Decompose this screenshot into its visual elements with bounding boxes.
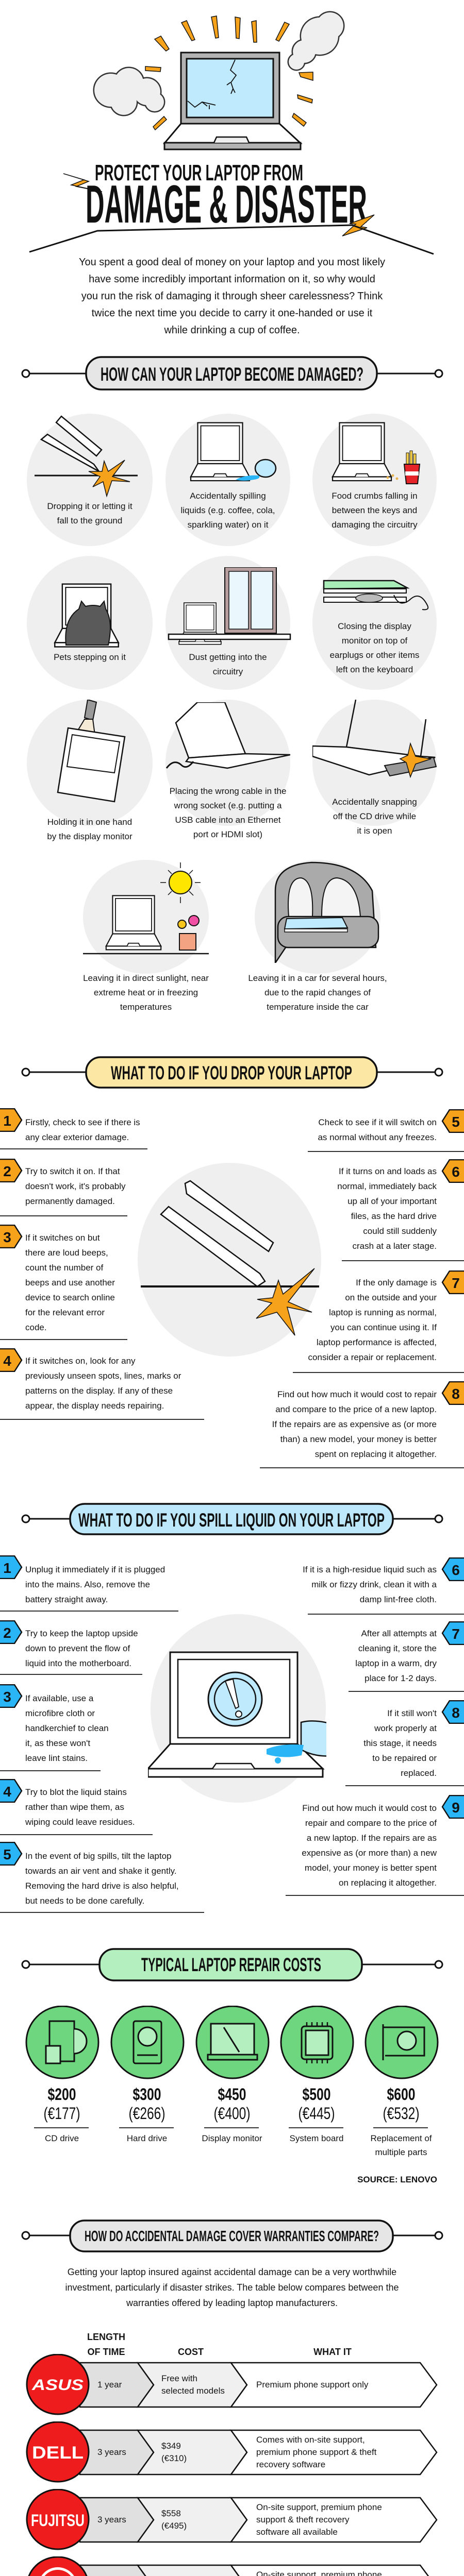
table column headers: LENGTH — [87, 2332, 125, 2342]
caption: by the display monitor — [47, 832, 132, 841]
panel: holding one hand — [27, 700, 153, 841]
step: drop 2: Try to switch it on. If that — [25, 1166, 120, 1176]
row: DELL: (€310) — [161, 2453, 187, 2463]
step: drop 6: could still suddenly — [363, 1226, 437, 1236]
step: spill 4: wiping could leave residues. — [25, 1817, 135, 1827]
badge: spill 8 — [441, 1700, 464, 1724]
panel: pets — [27, 556, 153, 690]
step: spill 9 — [302, 1801, 437, 1890]
step: spill 9: on replacing it altogether. — [339, 1878, 437, 1888]
caption: temperature inside the car — [267, 1002, 369, 1012]
step: spill 9: Find out how much it would cost to — [302, 1803, 437, 1813]
step: drop 5: Check to see if it will switch on — [318, 1117, 437, 1127]
step: drop 3 — [25, 1230, 115, 1335]
step: spill 5: towards an air vent and shake it gently. — [25, 1866, 177, 1876]
badge: spill 6: 6 — [452, 1562, 460, 1578]
icon: laptop with fries — [332, 422, 421, 484]
caption: wrong socket (e.g. putting a — [174, 801, 281, 810]
cost: CD drive: (€177) — [43, 2104, 80, 2123]
intro: warranties: Getting your laptop insured against accidental damage can be a very worthwhile — [68, 2267, 396, 2277]
icon: laptop with cable — [166, 702, 290, 769]
step: spill 8: If it still won't — [387, 1708, 437, 1718]
step: spill 7: place for 1-2 days. — [364, 1673, 437, 1683]
step: spill 8: to be repaired or — [372, 1753, 437, 1763]
caption: Closing the display — [338, 621, 411, 631]
heading: accidental damage cover warranties — [0, 2219, 464, 2253]
badge: drop 8 — [441, 1381, 464, 1405]
step: spill 6: damp lint-free cloth. — [360, 1595, 437, 1604]
cost: system board: System board — [290, 2133, 343, 2143]
caption — [47, 501, 132, 526]
step: spill 9: a new laptop. If the repairs are as — [307, 1833, 437, 1843]
step: spill 7: cleaning it, store the — [358, 1643, 437, 1653]
row: DELL: DELL — [32, 2443, 84, 2463]
step: drop 4 — [25, 1353, 181, 1413]
table column headers: COST — [178, 2347, 204, 2357]
step: drop 2: doesn't work, it's probably — [25, 1181, 126, 1191]
step: spill 3: handkerchief to clean — [25, 1723, 109, 1733]
step: drop 3: count the number of — [25, 1263, 103, 1273]
badge: spill 7: 7 — [452, 1626, 460, 1642]
step: drop 6: files, as the hard drive — [351, 1211, 437, 1221]
source: lenovo: SOURCE: LENOVO — [357, 2175, 437, 2184]
step: drop 6: normal, immediately back — [337, 1181, 437, 1191]
caption — [83, 973, 209, 1012]
step: drop 8: spent on replacing it altogether. — [315, 1449, 437, 1459]
step: drop 3: device to search online — [25, 1293, 115, 1302]
cost: multiple parts — [360, 2006, 442, 2171]
step: spill 6: milk or fizzy drink, clean it with a — [311, 1580, 437, 1589]
step: spill 5: Removing the hard drive is also helpful, — [25, 1881, 179, 1891]
intro text: have some incredibly important information on it, so why would — [89, 274, 375, 285]
caption — [180, 491, 275, 530]
panel: dropping — [27, 414, 153, 546]
step: spill 4 — [25, 1785, 135, 1829]
step: spill 2: liquid into the motherboard. — [25, 1658, 131, 1668]
badge: drop 2: 2 — [3, 1163, 11, 1179]
illustration: dropped laptop — [138, 1163, 321, 1357]
panel: left in car — [248, 860, 387, 1012]
step: drop 3: If it switches on but — [25, 1233, 100, 1243]
caption — [189, 652, 267, 676]
row: FUJITSU: (€495) — [161, 2521, 187, 2531]
caption — [248, 973, 387, 1012]
panel: spilling liquids — [165, 414, 290, 546]
step: drop 6: up all of your important — [347, 1196, 437, 1206]
step: spill 3: it, as these won't — [25, 1738, 90, 1748]
step: spill 2 — [25, 1626, 138, 1671]
caption: monitor on top of — [342, 636, 407, 646]
step: drop 7: consider a repair or replacement. — [308, 1352, 437, 1362]
step: spill 7: laptop in a warm, dry — [355, 1658, 437, 1668]
caption: Food crumbs falling in — [332, 491, 418, 501]
heading: what to do if you spill liquid — [0, 1503, 464, 1536]
step: spill 7 — [355, 1626, 437, 1686]
icon: chip — [280, 2006, 354, 2080]
cost: system board: $500 — [302, 2085, 331, 2104]
caption: Leaving it in a car for several hours, — [248, 973, 387, 983]
step: spill 1: into the mains. Also, remove the — [25, 1580, 150, 1589]
step: drop 8: If the repairs are as expensive as (or more — [272, 1419, 437, 1429]
row: ASUS: Free with — [161, 2374, 197, 2383]
badge: spill 7 — [441, 1621, 464, 1645]
step: drop 5 — [318, 1115, 437, 1145]
badge: spill 9 — [441, 1795, 464, 1819]
caption — [330, 621, 419, 674]
step: spill 8: work properly at — [374, 1723, 437, 1733]
step: spill 2: down to prevent the flow of — [25, 1643, 130, 1653]
badge: drop 3: 3 — [3, 1229, 11, 1245]
cost: multiple parts: $600 — [387, 2085, 416, 2104]
row: FUJITSU: $558 — [161, 2509, 181, 2518]
caption: USB cable into an Ethernet — [175, 815, 281, 825]
caption — [332, 491, 418, 530]
step: drop 3: for the relevant error — [25, 1308, 105, 1317]
badge: spill 2 — [0, 1620, 23, 1644]
row: DELL: premium phone support & theft — [256, 2447, 376, 2457]
icon: laptop sun and flower — [83, 862, 209, 954]
icon: laptop near window — [168, 567, 291, 645]
step: drop 2 — [25, 1164, 126, 1209]
row: DELL — [0, 2421, 464, 2483]
cost: CD drive: CD drive — [45, 2133, 79, 2143]
intro text: twice the next time you decide to carry it one-handed or use it — [92, 308, 372, 319]
step: drop 5: as normal without any freezes. — [318, 1132, 437, 1142]
caption: Accidentally snapping — [332, 797, 417, 807]
step: spill 5: but needs to be done carefully. — [25, 1896, 144, 1906]
panel: food crumbs — [312, 414, 437, 546]
step: spill 5 — [25, 1849, 179, 1908]
step: spill 8: this stage, it needs — [363, 1738, 437, 1748]
row: DELL: $349 — [161, 2441, 181, 2451]
step: spill 3: If available, use a — [25, 1693, 93, 1703]
cost: CD drive: $200 — [47, 2085, 76, 2104]
panel: closing display on earplugs — [312, 556, 437, 690]
icon: falling laptop — [35, 415, 138, 498]
step: drop 6 — [337, 1164, 437, 1253]
hero illustration: broken laptop — [93, 11, 344, 150]
badge: drop 4 — [0, 1348, 23, 1372]
caption: Pets stepping on it — [54, 652, 126, 662]
icon: laptop with CD drive — [312, 700, 437, 778]
step: drop 8: and compare to the price of a new laptop. — [275, 1404, 437, 1414]
caption: circuitry — [213, 667, 243, 676]
caption: extreme heat or in freezing — [94, 988, 198, 997]
cost: display monitor — [191, 2006, 273, 2171]
badge: spill 9: 9 — [452, 1800, 460, 1816]
step: drop 6: crash at a later stage. — [353, 1241, 437, 1251]
step: drop 4: If it switches on, look for any — [25, 1356, 136, 1366]
heading: what to do if you drop your laptop — [22, 1056, 443, 1089]
row: ASUS — [0, 2354, 464, 2416]
caption: Dropping it or letting it — [47, 501, 132, 511]
step: drop 4: previously unseen spots, lines, marks or — [25, 1371, 181, 1381]
caption — [47, 817, 132, 841]
badge: drop 5: 5 — [452, 1114, 460, 1130]
step: drop 2: permanently damaged. — [25, 1196, 115, 1206]
badge: drop 2 — [0, 1159, 23, 1182]
panel: snapping CD drive — [312, 700, 437, 836]
step: drop 1: Firstly, check to see if there is — [25, 1117, 140, 1127]
step: spill 7: After all attempts at — [361, 1629, 437, 1638]
badge: spill 6 — [441, 1557, 464, 1581]
row: FUJITSU: 3 years — [97, 2515, 126, 2524]
row: HP — [0, 2556, 464, 2576]
icon: display — [195, 2006, 270, 2080]
intro: warranties — [26, 2264, 438, 2311]
row: FUJITSU: FUJITSU — [31, 2511, 85, 2530]
cost: hard drive — [106, 2006, 188, 2171]
icon: cat on laptop — [54, 583, 120, 648]
caption — [170, 786, 286, 839]
intro text: you run the risk of damaging it through sheer carelessness? Think — [81, 291, 383, 302]
step: drop 6: If it turns on and loads as — [339, 1166, 437, 1176]
step: spill 9: expensive as (or more than) a new — [302, 1848, 437, 1858]
step: drop 8 — [272, 1387, 437, 1462]
caption: sparkling water) on it — [188, 520, 268, 530]
row: ASUS: Premium phone support only — [256, 2380, 368, 2389]
badge: drop 7: 7 — [452, 1275, 460, 1291]
caption: Dust getting into the — [189, 652, 267, 662]
step: spill 2: Try to keep the laptop upside — [25, 1629, 138, 1638]
step: drop 3: there are loud beeps, — [25, 1248, 108, 1258]
panel: dust — [165, 556, 291, 690]
row: FUJITSU — [0, 2489, 464, 2551]
badge: drop 3 — [0, 1225, 23, 1248]
title — [29, 160, 434, 255]
cost: system board: (€445) — [298, 2104, 335, 2123]
step: drop 7 — [308, 1275, 437, 1365]
step: drop 3: beeps and use another — [25, 1278, 115, 1287]
step: drop 7: If the only damage is — [356, 1278, 437, 1287]
caption: due to the rapid changes of — [264, 988, 371, 997]
step: spill 4: rather than wipe them, as — [25, 1802, 124, 1812]
icon: closed laptop with earplugs — [323, 580, 429, 610]
intro text: while drinking a cup of coffee. — [164, 325, 300, 336]
intro text — [79, 257, 385, 336]
step: drop 1 — [25, 1117, 140, 1142]
intro: warranties: investment, particularly if disaster strikes. The table below compares between the — [65, 2282, 399, 2293]
step: spill 9: repair and compare to the price of — [305, 1818, 437, 1828]
step: spill 4: Try to blot the liquid stains — [25, 1787, 127, 1797]
badge: spill 1 — [0, 1555, 23, 1579]
step: spill 5: In the event of big spills, tilt the laptop — [25, 1851, 172, 1861]
cost: display monitor: (€400) — [213, 2104, 251, 2123]
badge: spill 5 — [0, 1842, 23, 1866]
table column headers — [77, 2330, 387, 2361]
badge: drop 6: 6 — [452, 1164, 460, 1180]
cost: CD drive — [21, 2006, 103, 2171]
step: spill 8 — [363, 1706, 437, 1781]
caption: fall to the ground — [57, 516, 122, 526]
badge: drop 8: 8 — [452, 1386, 460, 1402]
cost: hard drive: $300 — [133, 2085, 161, 2104]
badge: spill 5: 5 — [3, 1846, 11, 1862]
table column headers: OF TIME — [88, 2347, 125, 2357]
cost: display monitor: Display monitor — [202, 2133, 262, 2143]
cost: system board — [275, 2006, 358, 2171]
heading: how can your laptop become damaged — [22, 356, 443, 391]
step: spill 6: If it is a high-residue liquid such as — [303, 1565, 437, 1574]
step: spill 1 — [25, 1562, 165, 1607]
icon: card — [364, 2006, 439, 2080]
step: drop 4: appear, the display needs repairing. — [25, 1401, 164, 1411]
row: DELL: recovery software — [256, 2460, 325, 2469]
step: spill 3 — [25, 1691, 109, 1766]
illustration: laptop with spill warning — [148, 1614, 326, 1803]
row: ASUS: 1 year — [97, 2380, 122, 2389]
badge: drop 1 — [0, 1108, 23, 1132]
caption: port or HDMI slot) — [193, 829, 262, 839]
badge: spill 4 — [0, 1779, 23, 1803]
icon: hand holding laptop — [57, 700, 126, 803]
title: PROTECT YOUR LAPTOP FROM — [95, 160, 303, 185]
step: drop 7: laptop is running as normal, — [329, 1308, 437, 1317]
caption: temperatures — [120, 1002, 172, 1012]
step: drop 7: laptop performance is affected, — [317, 1337, 437, 1347]
step: spill 3: microfibre cloth or — [25, 1708, 95, 1718]
row: DELL: 3 years — [97, 2447, 126, 2457]
badge: spill 8: 8 — [452, 1705, 460, 1721]
badge: spill 1: 1 — [3, 1560, 11, 1576]
caption: earplugs or other items — [330, 650, 419, 660]
badge: spill 2: 2 — [3, 1625, 11, 1641]
heading: typical laptop repair costs: TYPICAL LAPTOP REPAIR COSTS — [141, 1954, 321, 1975]
table column headers: WHAT IT OFFERS? — [311, 2347, 354, 2372]
badge: drop 7 — [441, 1270, 464, 1294]
intro text: You spent a good deal of money on your laptop and you most likely — [79, 257, 385, 268]
badge: drop 6 — [441, 1159, 464, 1183]
step: drop 7: you can continue using it. If — [330, 1323, 437, 1332]
step: drop 8: than) a new model, your money is better — [280, 1434, 437, 1444]
caption: Leaving it in direct sunlight, near — [83, 973, 209, 983]
icon: CD drive — [25, 2006, 100, 2080]
step: drop 7: on the outside and your — [345, 1293, 437, 1302]
row: FUJITSU: software all available — [256, 2527, 338, 2537]
caption: liquids (e.g. coffee, cola, — [180, 505, 275, 515]
panel: wrong cable — [165, 700, 290, 839]
badge: spill 3: 3 — [3, 1689, 11, 1705]
heading: typical laptop repair costs — [0, 1948, 464, 1982]
row: ASUS: selected models — [161, 2386, 225, 2396]
step: drop 1: any clear exterior damage. — [25, 1132, 129, 1142]
row: FUJITSU: On-site support, premium phone — [256, 2502, 382, 2512]
step: spill 3: leave lint stains. — [25, 1753, 88, 1763]
cost: hard drive: Hard drive — [127, 2133, 167, 2143]
caption: off the CD drive while — [333, 811, 416, 821]
row: ASUS: ASUS — [31, 2377, 84, 2394]
intro: warranties: warranties offered by leading laptop manufacturers. — [126, 2298, 338, 2308]
cost: multiple parts: multiple parts — [375, 2147, 427, 2157]
cost: hard drive: (€266) — [129, 2104, 165, 2123]
step: drop 3: code. — [25, 1323, 47, 1332]
icon: car seat with laptop — [274, 861, 379, 963]
icon: laptop with cup — [190, 422, 276, 481]
badge: drop 4: 4 — [3, 1353, 11, 1369]
icon: hard drive — [110, 2006, 185, 2080]
badge: drop 5 — [441, 1109, 464, 1133]
step: spill 1: battery straight away. — [25, 1595, 108, 1604]
badge: spill 3 — [0, 1684, 23, 1708]
caption: it is open — [357, 826, 392, 836]
caption: Placing the wrong cable in the — [170, 786, 286, 796]
cost: multiple parts: (€532) — [383, 2104, 420, 2123]
caption: left on the keyboard — [336, 665, 413, 674]
step: spill 1: Unplug it immediately if it is plugged — [25, 1565, 165, 1574]
step: drop 4: patterns on the display. If any of these — [25, 1386, 173, 1396]
caption: Holding it in one hand — [47, 817, 132, 827]
step: spill 6 — [303, 1562, 437, 1607]
caption: damaging the circuitry — [332, 520, 418, 530]
step: spill 8: replaced. — [401, 1768, 437, 1778]
badge: spill 4: 4 — [3, 1784, 11, 1800]
cost: display monitor: $450 — [218, 2085, 246, 2104]
cost: multiple parts: Replacement of — [370, 2133, 432, 2143]
caption: Accidentally spilling — [190, 491, 266, 501]
step: drop 8: Find out how much it would cost to repair — [277, 1389, 437, 1399]
step: spill 9: model, your money is better spent — [305, 1863, 437, 1873]
row: FUJITSU: support & theft recovery — [256, 2515, 349, 2524]
panel: direct sunlight — [83, 860, 209, 1012]
row: DELL: Comes with on-site support, — [256, 2435, 365, 2445]
badge: drop 1: 1 — [3, 1113, 11, 1129]
caption — [332, 797, 417, 836]
caption: between the keys and — [332, 505, 417, 515]
